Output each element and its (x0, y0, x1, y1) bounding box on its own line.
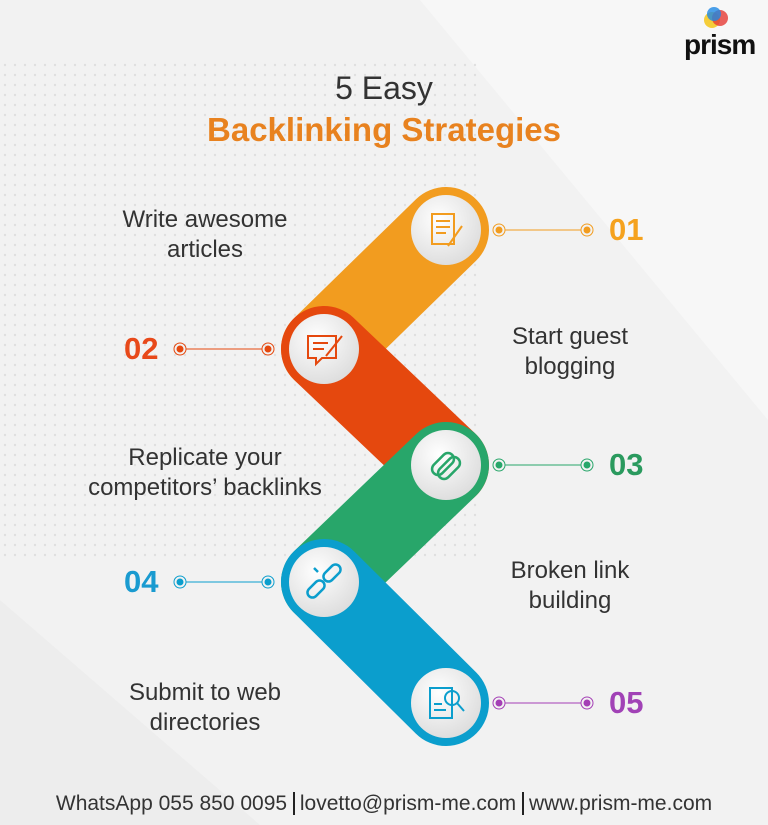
text 4 (511, 557, 630, 614)
text 5: Submit to web (129, 679, 281, 706)
icon circle 5 (411, 668, 481, 738)
text 3: competitors’ backlinks (88, 474, 322, 501)
text 1: Write awesome (123, 206, 287, 233)
text 4: Broken link (511, 557, 629, 584)
number 02: 02 (124, 331, 158, 366)
connector 3 (493, 459, 593, 471)
connector 2 (174, 343, 274, 355)
connector 1 (493, 224, 593, 236)
icon circle 3 (411, 430, 481, 500)
icon circle 1 (411, 195, 481, 265)
text 2: Start guest (512, 323, 628, 350)
subtitle: Backlinking Strategies (207, 111, 561, 148)
connector 5 (493, 697, 593, 709)
icon circle 4 (289, 547, 359, 617)
text 1: articles (167, 236, 243, 263)
text 3 (88, 444, 322, 501)
number 04: 04 (124, 564, 158, 599)
connector 4 (174, 576, 274, 588)
ribbon: orange (324, 230, 446, 349)
number 03: 03 (609, 447, 643, 482)
text 4: building (529, 587, 611, 614)
ribbon: green (324, 465, 446, 582)
ribbon: blue (324, 582, 446, 703)
text 5 (129, 679, 281, 736)
ribbon: red (324, 349, 446, 465)
title: 5 Easy (335, 70, 433, 106)
logo text: prism (684, 29, 755, 60)
icon circle 2 (289, 314, 359, 384)
text 2 (512, 323, 628, 380)
text 1 (122, 206, 287, 263)
number 01: 01 (609, 212, 643, 247)
number 05: 05 (609, 685, 643, 720)
footer contact: WhatsApp 055 850 0095 lovetto@prism-me.com www.prism-me.com (56, 792, 712, 815)
text 2: blogging (525, 353, 615, 380)
text 5: directories (150, 709, 260, 736)
text 3: Replicate your (128, 444, 282, 471)
logo mark (704, 7, 728, 28)
